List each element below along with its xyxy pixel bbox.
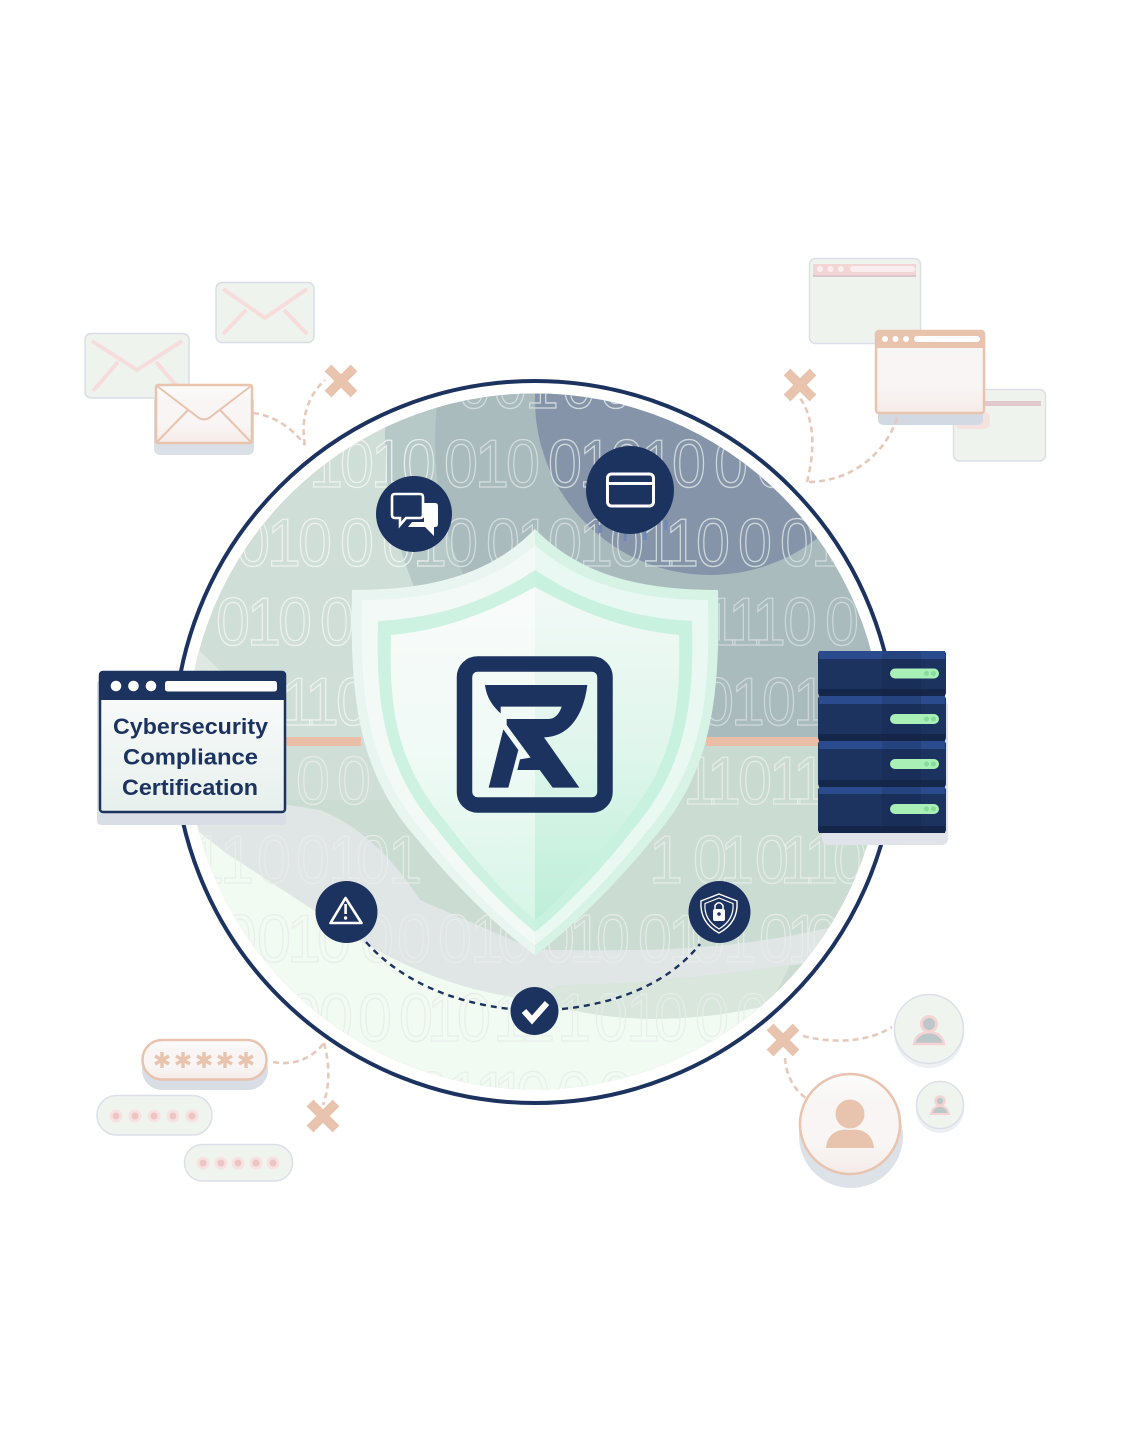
ghost envelope left bbox=[85, 334, 189, 398]
icon: lock shield bbox=[688, 881, 750, 943]
envelopes group bbox=[85, 282, 314, 455]
ghost password field left bbox=[97, 1096, 212, 1135]
password fields group bbox=[97, 1040, 292, 1181]
ghost window right bbox=[954, 390, 1046, 461]
main password field bbox=[142, 1040, 268, 1090]
ghost envelope top bbox=[216, 282, 314, 342]
main avatar bbox=[799, 1074, 903, 1188]
ghost avatar small bbox=[916, 1082, 964, 1133]
main envelope bbox=[154, 385, 254, 455]
browser windows group bbox=[810, 258, 1046, 461]
central disc background with binary pattern: 00001011101000 bbox=[287, 980, 770, 1056]
outer navy ring bbox=[174, 381, 896, 1103]
central disc background with binary pattern: 0111000 bbox=[415, 1058, 633, 1134]
icon: warning triangle bbox=[316, 881, 378, 943]
ghost password field right bbox=[184, 1144, 292, 1181]
connector: envelope to x bbox=[253, 368, 354, 445]
icon: payment card bbox=[586, 446, 674, 541]
connector: window to x bbox=[787, 372, 897, 482]
central disc background with binary pattern: 00100 bbox=[457, 347, 633, 423]
central disc background with binary pattern: 11001011 bbox=[281, 664, 851, 740]
server rack bbox=[818, 651, 948, 845]
certification card: Cybersecurity bbox=[113, 714, 268, 739]
user avatars group bbox=[799, 994, 964, 1188]
central disc background with binary pattern bbox=[194, 394, 871, 1090]
central disc background with binary pattern: 010011100 bbox=[216, 584, 859, 660]
main window bbox=[875, 330, 985, 425]
certification card: Compliance bbox=[123, 744, 258, 770]
central disc background with binary pattern: 10100100101000 bbox=[309, 426, 790, 502]
shield bbox=[352, 529, 718, 955]
certification card bbox=[97, 671, 286, 825]
central disc background with binary pattern: 0011011 bbox=[296, 743, 827, 819]
ghost window top bbox=[810, 258, 920, 344]
icon: check mark bbox=[510, 987, 558, 1035]
icon: chat bubbles bbox=[376, 476, 452, 552]
central disc background with binary pattern: 0010000100100101010 bbox=[223, 901, 840, 977]
ghost avatar top bbox=[894, 994, 964, 1068]
central disc background with binary pattern: 010001001010110001 bbox=[236, 505, 845, 581]
connector: users to x bbox=[770, 1027, 892, 1098]
dashed arc between status icons bbox=[366, 942, 700, 1009]
connector: password to x bbox=[273, 1043, 336, 1129]
certification card: Certification bbox=[122, 775, 258, 800]
connector bars bbox=[285, 737, 822, 746]
logo mark bbox=[464, 664, 605, 805]
central disc background with binary pattern: 11001011010110 bbox=[190, 822, 867, 898]
